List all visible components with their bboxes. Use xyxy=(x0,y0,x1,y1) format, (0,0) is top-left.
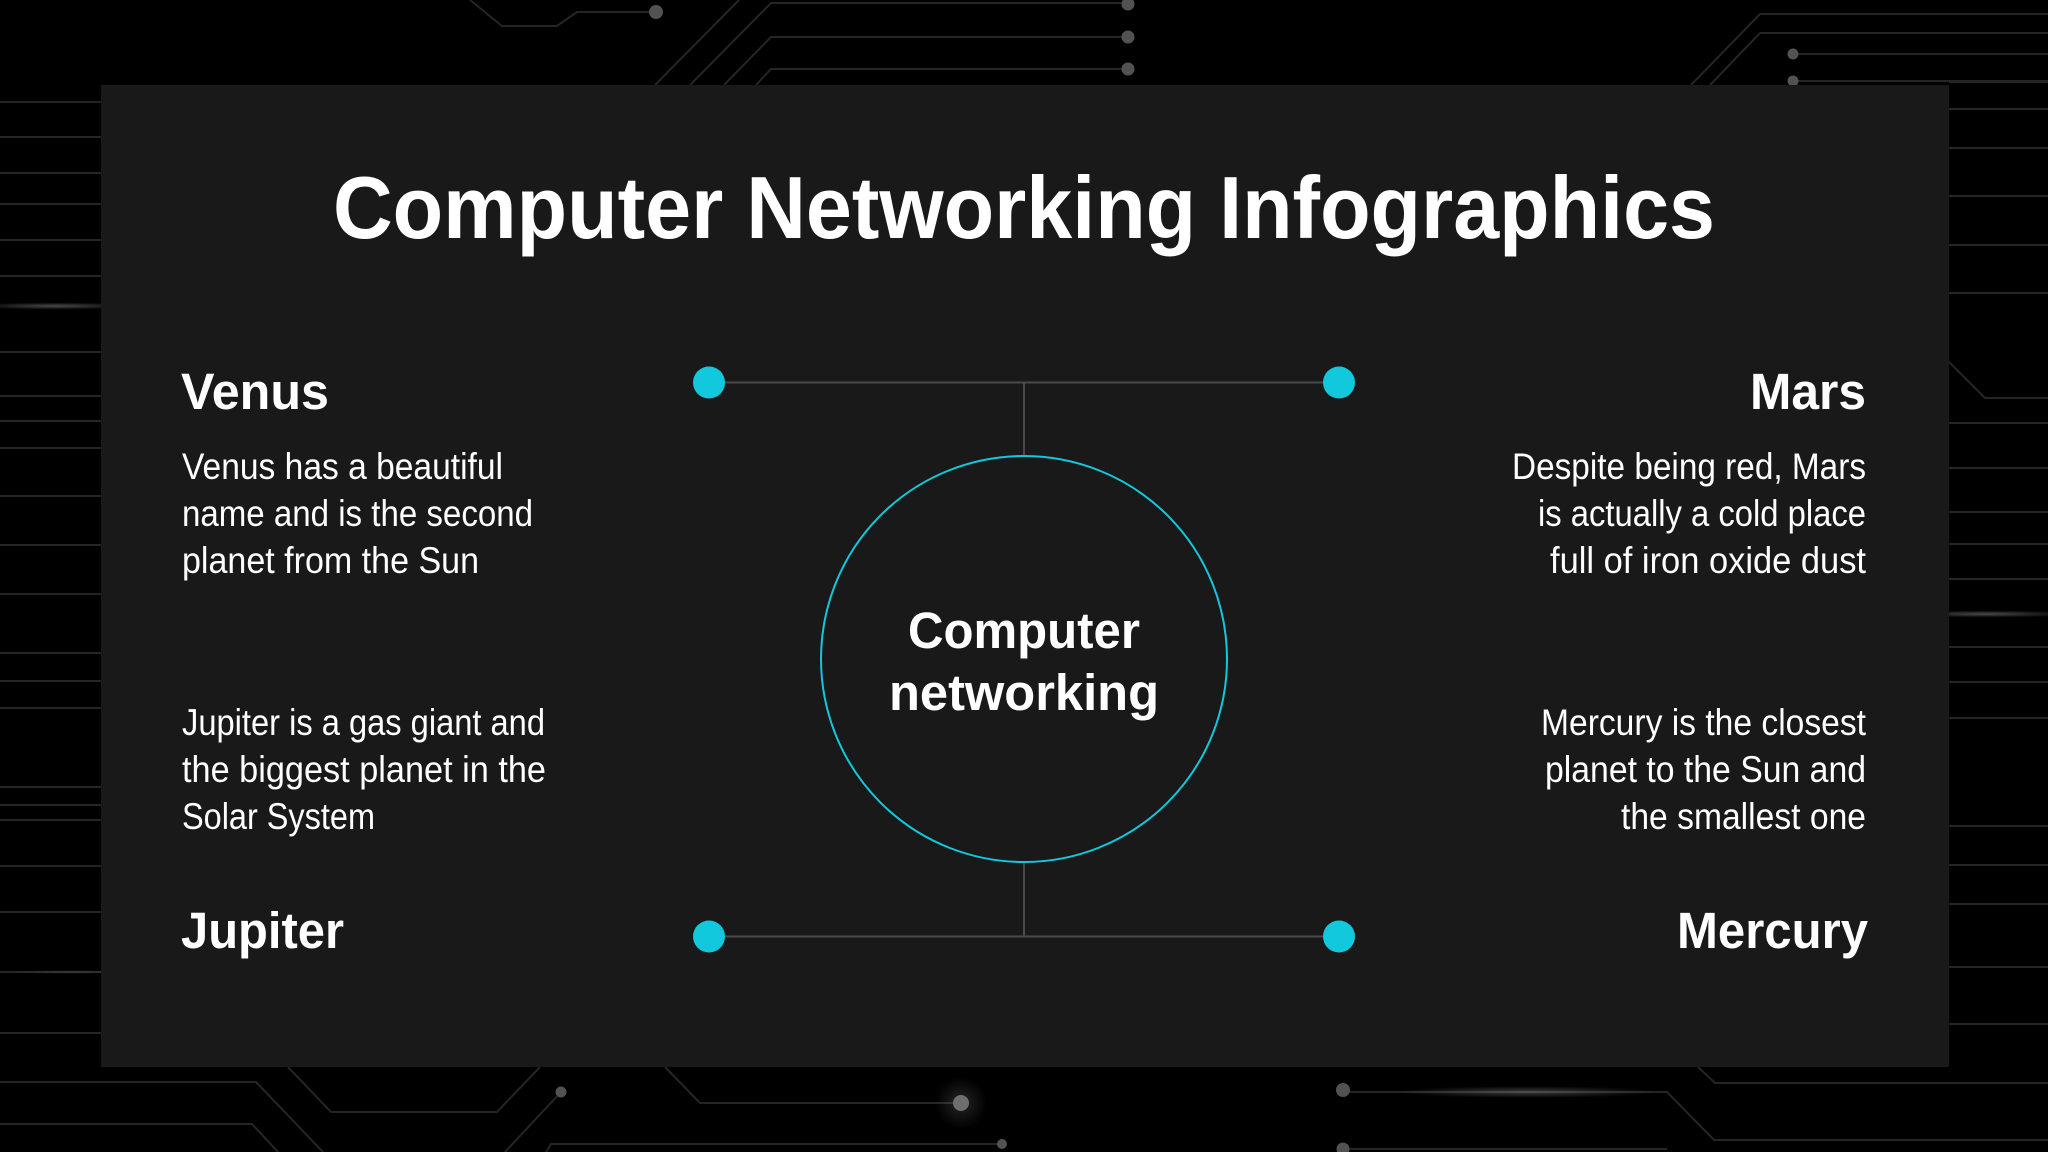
block: Venus xyxy=(181,363,533,581)
text: Venus description xyxy=(182,446,533,581)
center label xyxy=(889,602,1159,721)
text: Mars description: is actually a cold place xyxy=(1538,493,1866,534)
circuit nodes xyxy=(556,0,1798,1152)
panel xyxy=(101,85,1949,1067)
heading: Jupiter: Jupiter xyxy=(181,902,344,959)
text: Jupiter description xyxy=(182,702,546,837)
text: Mercury description xyxy=(1541,702,1867,837)
node: Mercury xyxy=(1323,920,1355,952)
node: Jupiter xyxy=(693,920,725,952)
connector lines xyxy=(709,382,1339,936)
heading: Venus: Venus xyxy=(181,363,329,420)
background glows xyxy=(0,302,2048,1129)
text: Jupiter description: Solar System xyxy=(182,796,375,837)
block: Jupiter xyxy=(181,702,546,959)
center label: networking xyxy=(889,664,1159,721)
center label: Computer xyxy=(908,602,1140,659)
heading: Mercury: Mercury xyxy=(1677,902,1869,959)
connector diagram xyxy=(693,366,1355,952)
node: Mars xyxy=(1323,366,1355,398)
text: Venus description: name and is the second xyxy=(182,493,533,534)
text: Jupiter description: Jupiter is a gas giant and xyxy=(182,702,545,743)
text: Mars description: full of iron oxide dust xyxy=(1550,540,1867,581)
block: Mercury xyxy=(1541,702,1869,959)
heading: Mars: Mars xyxy=(1750,363,1866,420)
text: Mercury description: planet to the Sun and xyxy=(1545,749,1866,790)
text: Mercury description: Mercury is the closest xyxy=(1541,702,1867,743)
text: Mercury description: the smallest one xyxy=(1621,796,1866,837)
text: Jupiter description: the biggest planet in the xyxy=(182,749,546,790)
text: Mars description: Despite being red, Mars xyxy=(1512,446,1866,487)
text: Mars description xyxy=(1512,446,1867,581)
title: Computer Networking Infographics xyxy=(333,158,1715,257)
central circle xyxy=(821,456,1227,862)
node: Venus xyxy=(693,366,725,398)
text: Venus description: Venus has a beautiful xyxy=(182,446,503,487)
block: Mars xyxy=(1512,363,1867,581)
text: Venus description: planet from the Sun xyxy=(182,540,479,581)
